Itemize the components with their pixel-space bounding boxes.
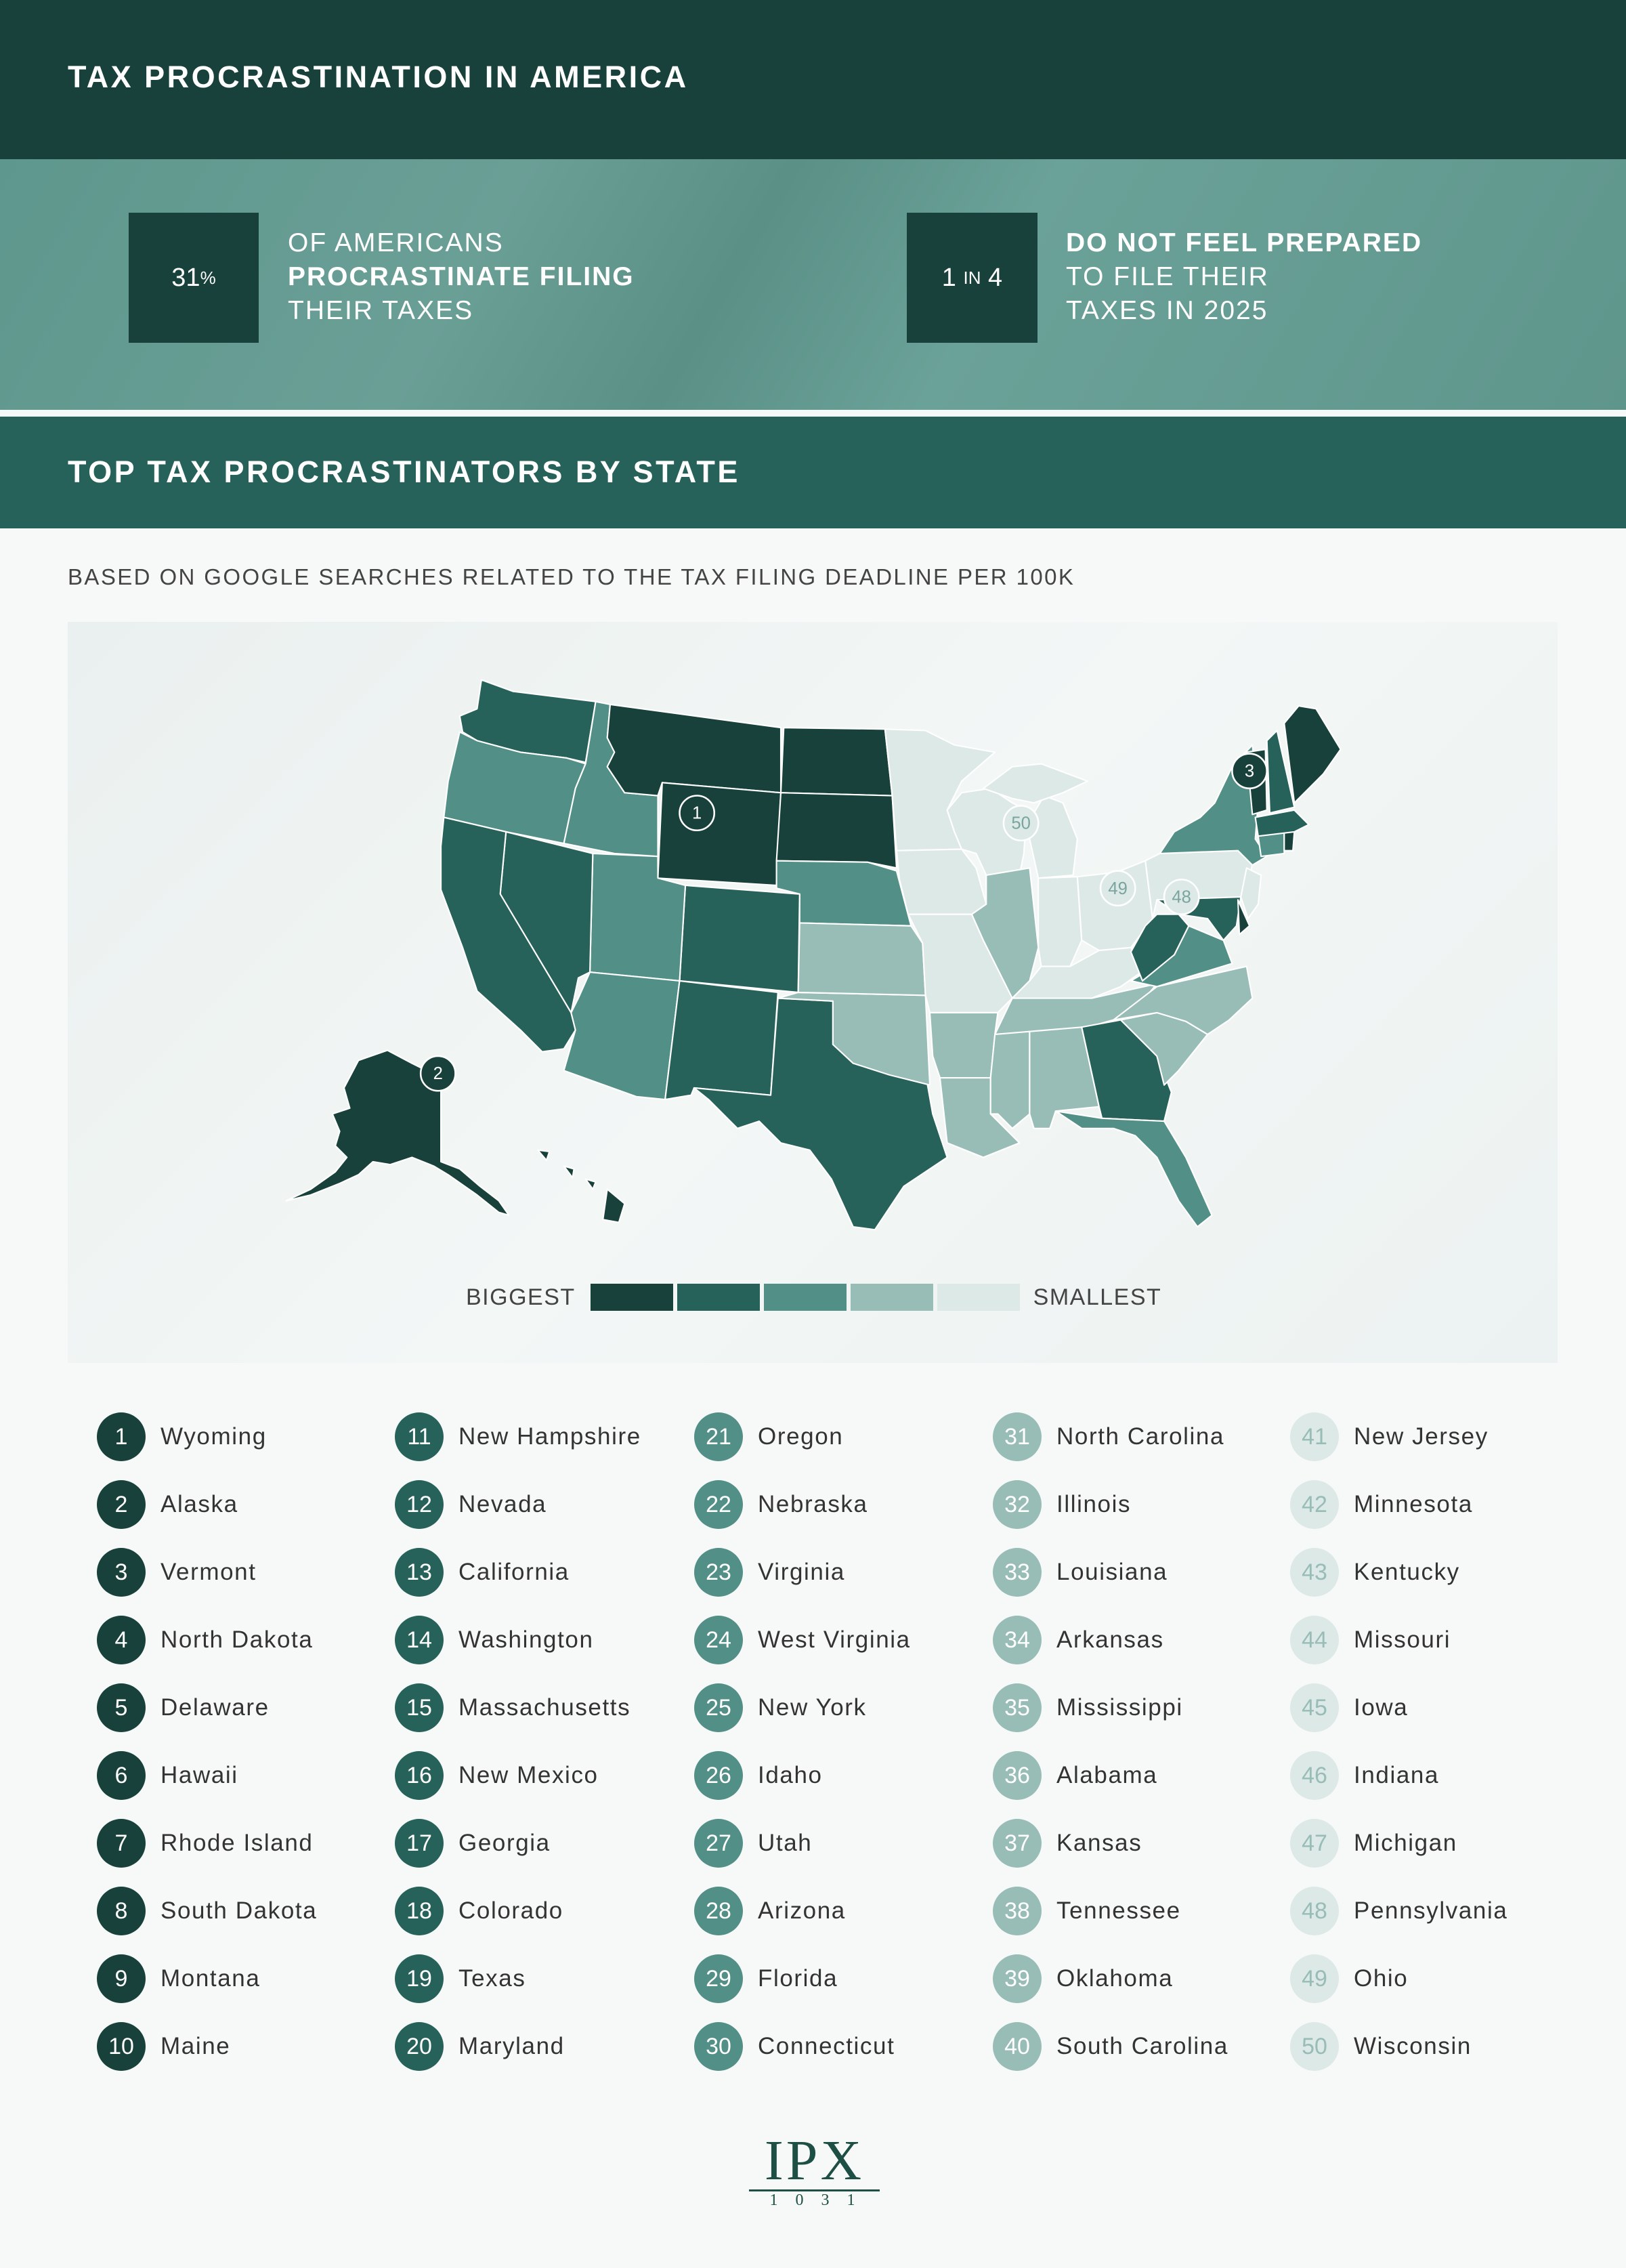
ranked list: Kentucky bbox=[1354, 1559, 1460, 1585]
badges: 2 bbox=[433, 1064, 443, 1083]
ranked list: 40 bbox=[1004, 2034, 1030, 2059]
panel: stats photo band bbox=[0, 159, 1626, 410]
logo: IPX 1031 bbox=[749, 2129, 880, 2209]
ranked list: 23 bbox=[706, 1559, 731, 1585]
badges: 50 bbox=[1011, 814, 1031, 833]
ranked list: 22 bbox=[706, 1492, 731, 1517]
ranked list: Ohio bbox=[1354, 1965, 1408, 1992]
stat box: 1 in 4: IN bbox=[963, 267, 981, 287]
subtitle: BASED ON GOOGLE SEARCHES RELATED TO THE TAX FILING DEADLINE PER 100K bbox=[68, 564, 1075, 589]
ranked list: 7 bbox=[115, 1830, 127, 1856]
ranked list: 34 bbox=[1004, 1627, 1030, 1653]
ranked list: Illinois bbox=[1056, 1491, 1131, 1517]
stat text 2: TAXES IN 2025 bbox=[1066, 296, 1268, 325]
ranked list: Kansas bbox=[1056, 1830, 1142, 1856]
ranked list: Idaho bbox=[758, 1762, 823, 1788]
ranked list: 45 bbox=[1302, 1695, 1327, 1721]
ranked list: Virginia bbox=[758, 1559, 845, 1585]
ranked list: 8 bbox=[115, 1898, 127, 1924]
stat box: 31%: % bbox=[200, 267, 216, 287]
ranked list: 19 bbox=[406, 1966, 432, 1992]
ranked list: 27 bbox=[706, 1830, 731, 1856]
ranked list: 1 bbox=[115, 1424, 127, 1450]
ranked list: 33 bbox=[1004, 1559, 1030, 1585]
stat text 1: OF AMERICANS bbox=[288, 228, 504, 257]
ranked list: 43 bbox=[1302, 1559, 1327, 1585]
ranked list: Florida bbox=[758, 1965, 838, 1992]
ranked list: 20 bbox=[406, 2034, 432, 2059]
ranked list: Louisiana bbox=[1056, 1559, 1168, 1585]
ranked list: Washington bbox=[458, 1626, 594, 1653]
ranked list: 11 bbox=[407, 1424, 431, 1450]
ranked list: Michigan bbox=[1354, 1830, 1457, 1856]
ranked list: 15 bbox=[406, 1695, 432, 1721]
ranked list: Texas bbox=[458, 1965, 526, 1992]
ranked list: 5 bbox=[115, 1695, 127, 1721]
ranked list: 31 bbox=[1004, 1424, 1030, 1450]
ranked list: 25 bbox=[706, 1695, 731, 1721]
ranked list: 37 bbox=[1004, 1830, 1030, 1856]
ranked list: Georgia bbox=[458, 1830, 551, 1856]
ranked list: South Dakota bbox=[161, 1897, 317, 1924]
ranked list: 13 bbox=[406, 1559, 432, 1585]
ranked list: Arkansas bbox=[1056, 1626, 1164, 1653]
choropleth map bbox=[286, 679, 1341, 1230]
stat box: 1 in 4: 1 4 bbox=[942, 263, 1002, 291]
ranked list: New York bbox=[758, 1694, 867, 1721]
ranked list: 46 bbox=[1302, 1763, 1327, 1788]
legend bbox=[466, 1284, 1161, 1311]
ranked list: 9 bbox=[115, 1966, 127, 1992]
ranked list: 26 bbox=[706, 1763, 731, 1788]
ranked list: 32 bbox=[1004, 1492, 1030, 1517]
stat text 2 bbox=[1066, 228, 1422, 325]
ranked list: Vermont bbox=[161, 1559, 257, 1585]
ranked list: 28 bbox=[706, 1898, 731, 1924]
ranked list: Nevada bbox=[458, 1491, 547, 1517]
stat text 1 bbox=[288, 228, 635, 325]
ranked list: Wyoming bbox=[161, 1423, 267, 1450]
ranked list: Montana bbox=[161, 1965, 260, 1992]
ranked list: 49 bbox=[1302, 1966, 1327, 1992]
ranked list: California bbox=[458, 1559, 570, 1585]
ranked list bbox=[97, 1412, 1507, 2071]
ranked list: New Mexico bbox=[458, 1762, 599, 1788]
ranked list: Alabama bbox=[1056, 1762, 1157, 1788]
ranked list: North Carolina bbox=[1056, 1423, 1224, 1450]
stat box: 31% bbox=[129, 213, 259, 343]
ranked list: Arizona bbox=[758, 1897, 846, 1924]
panel: map bbox=[68, 622, 1558, 1363]
ranked list: New Hampshire bbox=[458, 1423, 641, 1450]
ranked list: Iowa bbox=[1354, 1694, 1408, 1721]
header: section band bbox=[0, 417, 1626, 528]
stat box: 31%: 31 bbox=[171, 263, 200, 291]
ranked list: 38 bbox=[1004, 1898, 1030, 1924]
ranked list: South Carolina bbox=[1056, 2033, 1228, 2059]
ranked list: Massachusetts bbox=[458, 1694, 630, 1721]
ranked list: 42 bbox=[1302, 1492, 1327, 1517]
ranked list: 44 bbox=[1302, 1627, 1327, 1653]
ranked list: 48 bbox=[1302, 1898, 1327, 1924]
ranked list: Missouri bbox=[1354, 1626, 1451, 1653]
badges: 48 bbox=[1172, 888, 1191, 907]
ranked list: New Jersey bbox=[1354, 1423, 1489, 1450]
ranked list: 4 bbox=[115, 1627, 127, 1653]
ranked list: Oklahoma bbox=[1056, 1965, 1173, 1992]
ranked list: Colorado bbox=[458, 1897, 563, 1924]
ranked list: Wisconsin bbox=[1354, 2033, 1472, 2059]
stat text 2: TO FILE THEIR bbox=[1066, 262, 1269, 291]
ranked list: Rhode Island bbox=[161, 1830, 313, 1856]
ranked list: Delaware bbox=[161, 1694, 270, 1721]
badges: 49 bbox=[1108, 879, 1128, 898]
ranked list: Maine bbox=[161, 2033, 230, 2059]
stat text 1: THEIR TAXES bbox=[288, 296, 473, 325]
ranked list: 29 bbox=[706, 1966, 731, 1992]
ranked list: 47 bbox=[1302, 1830, 1327, 1856]
ranked list: Alaska bbox=[161, 1491, 238, 1517]
header: title band bbox=[0, 0, 1626, 159]
ranked list: 39 bbox=[1004, 1966, 1030, 1992]
logo: IPX 1031: IPX bbox=[765, 2129, 864, 2192]
ranked list: Nebraska bbox=[758, 1491, 868, 1517]
ranked list: 21 bbox=[706, 1424, 731, 1450]
badges: 1 bbox=[692, 804, 702, 823]
ranked list: 6 bbox=[115, 1763, 127, 1788]
stat text 2: DO NOT FEEL PREPARED bbox=[1066, 228, 1422, 257]
stat text 1: PROCRASTINATE FILING bbox=[288, 262, 635, 291]
ranked list: Connecticut bbox=[758, 2033, 895, 2059]
logo: IPX 1031: 1031 bbox=[769, 2191, 872, 2209]
ranked list: 36 bbox=[1004, 1763, 1030, 1788]
ranked list: 14 bbox=[406, 1627, 432, 1653]
ranked list: 30 bbox=[706, 2034, 731, 2059]
ranked list: Mississippi bbox=[1056, 1694, 1183, 1721]
ranked list: 10 bbox=[108, 2034, 134, 2059]
ranked list: Oregon bbox=[758, 1423, 843, 1450]
ranked list: Pennsylvania bbox=[1354, 1897, 1507, 1924]
ranked list: Indiana bbox=[1354, 1762, 1439, 1788]
legend: BIGGEST bbox=[466, 1284, 576, 1310]
ranked list: 50 bbox=[1302, 2034, 1327, 2059]
ranked list: Minnesota bbox=[1354, 1491, 1473, 1517]
ranked list: 2 bbox=[115, 1492, 127, 1517]
ranked list: 12 bbox=[406, 1492, 432, 1517]
ranked list: 41 bbox=[1302, 1424, 1327, 1450]
ranked list: Maryland bbox=[458, 2033, 565, 2059]
ranked list: Tennessee bbox=[1056, 1897, 1181, 1924]
ranked list: 16 bbox=[406, 1763, 432, 1788]
badges: 3 bbox=[1245, 762, 1254, 781]
ranked list: Hawaii bbox=[161, 1762, 238, 1788]
ranked list: North Dakota bbox=[161, 1626, 313, 1653]
ranked list: 17 bbox=[406, 1830, 432, 1856]
section heading: TOP TAX PROCRASTINATORS BY STATE bbox=[68, 455, 740, 489]
ranked list: Utah bbox=[758, 1830, 812, 1856]
stat box: 1 in 4 bbox=[907, 213, 1037, 343]
ranked list: 35 bbox=[1004, 1695, 1030, 1721]
badges bbox=[421, 754, 1267, 1091]
ranked list: 18 bbox=[406, 1898, 432, 1924]
ranked list: West Virginia bbox=[758, 1626, 911, 1653]
ranked list: 3 bbox=[115, 1559, 127, 1585]
legend: SMALLEST bbox=[1033, 1284, 1161, 1310]
title: TAX PROCRASTINATION IN AMERICA bbox=[68, 60, 689, 94]
ranked list: 24 bbox=[706, 1627, 731, 1653]
